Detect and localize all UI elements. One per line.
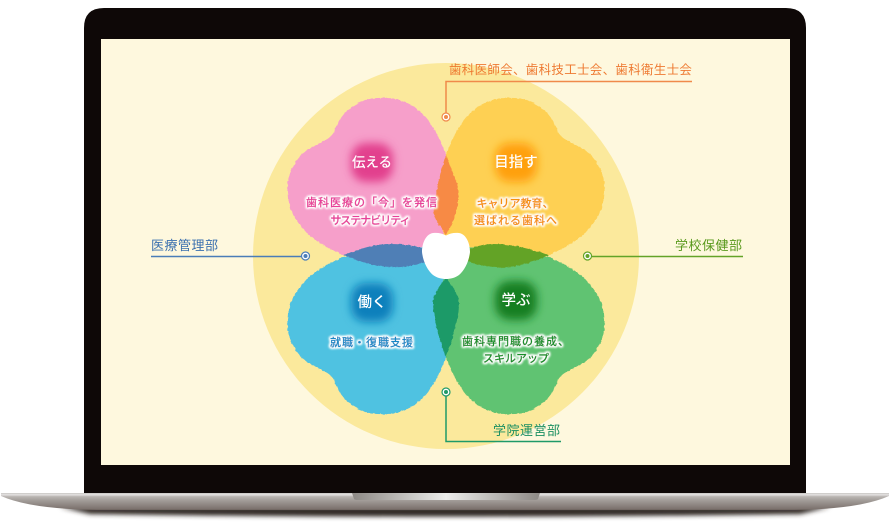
callout: left: [151, 238, 310, 260]
text: green petal: [462, 334, 570, 365]
text: pink petal: [306, 195, 438, 227]
heading: 伝える: 伝える: [352, 155, 392, 170]
text: blue petal: 就職・復職支援: [330, 335, 414, 349]
callout: right: 学校保健部: [675, 238, 743, 253]
callout: bottom: 学院運営部: [493, 423, 561, 438]
callout: top: [442, 63, 692, 121]
glow blob: pink: [351, 143, 393, 182]
text: yellow petal: キャリア教育、: [476, 196, 554, 210]
background circle: [253, 63, 639, 449]
petal: pink: [287, 98, 456, 265]
clover diagram: [287, 98, 605, 414]
heading: 働く: 働く: [358, 294, 386, 311]
glow blob: blue: [351, 283, 393, 322]
callout: right: [584, 238, 743, 260]
text: green petal: スキルアップ: [483, 352, 549, 365]
petal: yellow: [436, 98, 605, 265]
text: yellow petal: [474, 196, 558, 227]
overlap: blue: [343, 244, 426, 267]
tooth icon: [422, 233, 470, 279]
callout: bottom: [442, 388, 561, 442]
overlap: teal: [433, 278, 459, 357]
petal: green: [436, 247, 605, 414]
callout: top: 歯科医師会、歯科技工士会、歯科衛生士会: [449, 63, 692, 77]
glow blob: green: [495, 281, 537, 320]
overlap: olive green: [466, 244, 549, 267]
text: yellow petal: 選ばれる歯科へ: [474, 213, 558, 227]
text: pink petal: 歯科医療の「今」を発信: [306, 195, 438, 209]
screen background: [101, 39, 790, 465]
overlap: orange: [434, 155, 458, 235]
glow blob: orange: [495, 143, 537, 182]
heading: 目指す: 目指す: [494, 154, 538, 171]
laptop bezel: [84, 8, 806, 493]
heading: 学ぶ: 学ぶ: [502, 292, 531, 309]
text: pink petal: サステナビリティ: [330, 214, 410, 227]
text: green petal: 歯科専門職の養成、: [462, 334, 570, 348]
petal: blue: [287, 247, 456, 414]
laptop base: [1, 493, 889, 516]
callout: left: 医療管理部: [151, 238, 219, 253]
